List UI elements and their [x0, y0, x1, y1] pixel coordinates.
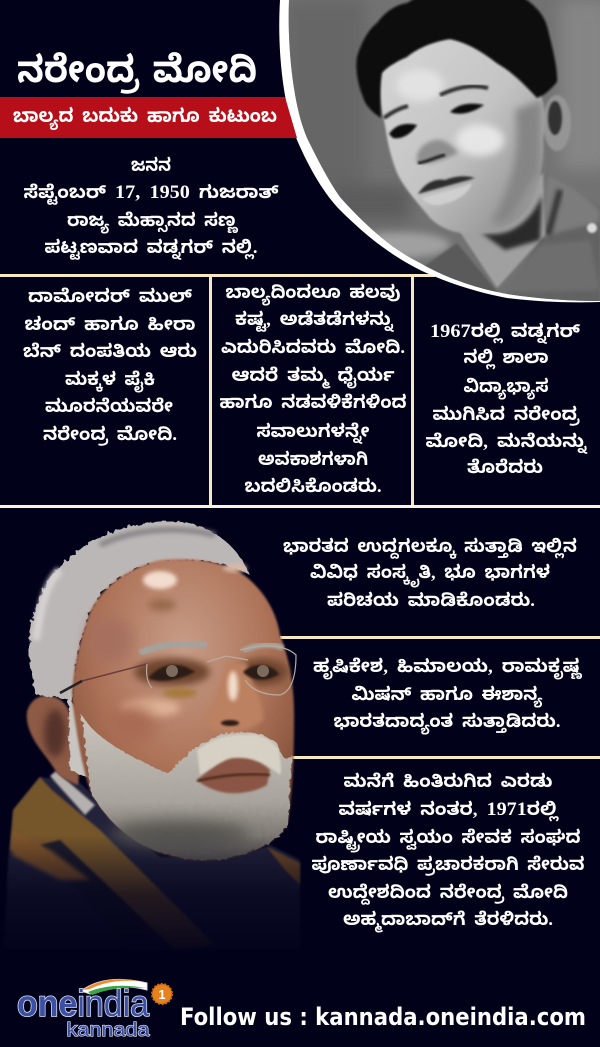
- eye sockets: [134, 658, 210, 686]
- text block: birth: ಜನನ: [131, 155, 171, 175]
- text block: 1971 Ahmedabad: ರಾಷ್ಟ್ರೀಯ ಸ್ವಯಂ ಸೇವಕ ಸಂಘದ: [316, 827, 581, 853]
- shirt: [424, 243, 499, 292]
- logo: oneindia kannada: kannada: [66, 1020, 150, 1041]
- text block: birth: ರಾಜ್ಯ ಮೆಹ್ಸಾನದ ಸಣ್ಣ: [67, 210, 238, 234]
- text block: 1971 Ahmedabad: ಉದ್ದೇಶದಿಂದ ನರೇಂದ್ರ ಮೋದಿ: [328, 882, 568, 905]
- hair: [356, 0, 557, 118]
- ear: [27, 696, 79, 785]
- lips: [197, 758, 270, 793]
- text block: 1971 Ahmedabad: ಪೂರ್ಣಾವಧಿ ಪ್ರಚಾರಕರಾಗಿ ಸೇರುವ: [312, 854, 584, 876]
- text block: 1971 Ahmedabad: ಮನೆಗೆ ಹಿಂತಿರುಗಿದ ಎರಡು: [344, 771, 552, 791]
- hair: [29, 521, 250, 780]
- text block: childhood hardships: ಬಾಲ್ಯದಿಂದಲೂ ಹಲವು: [226, 282, 400, 306]
- logo: oneindia kannada: oneindia: [17, 983, 149, 1024]
- text block: travels across India: ಪರಿಚಯ ಮಾಡಿಕೊಂಡರು.: [327, 590, 535, 610]
- text block: childhood hardships: [220, 282, 407, 496]
- text block: left home 1967: ಮುಗಿಸಿದ ನರೇಂದ್ರ: [432, 404, 580, 426]
- text block: left home 1967: ನಲ್ಲಿ ಶಾಲಾ: [464, 347, 548, 370]
- photo: young Narendra Modi in circle: [279, 0, 600, 305]
- text block: childhood hardships: ಆದರೆ ತಮ್ಮ ಧೈರ್ಯ: [232, 365, 395, 389]
- face: [72, 559, 294, 860]
- text block: travels across India: ಭಾರತದ ಉದ್ದಗಲಕ್ಕೂ ಸುತ್ತಾಡಿ ಇಲ್ಲಿನ: [283, 536, 577, 559]
- nose: [417, 140, 458, 163]
- text block: childhood hardships: ಬದಲಿಸಿಕೊಂಡರು.: [244, 476, 382, 496]
- text block: 1971 Ahmedabad: [312, 771, 584, 933]
- text block: parents: ಮಕ್ಕಳ ಪೈಕಿ: [65, 369, 155, 393]
- eyebrows: [440, 86, 488, 95]
- logo: oneindia kannada: 1: [158, 987, 166, 1002]
- text block: places visited: [313, 656, 583, 735]
- text block: childhood hardships: ಅವಕಾಶಗಳಾಗಿ: [258, 449, 368, 469]
- logo: oneindia kannada: [17, 979, 172, 1041]
- beard: [82, 715, 292, 860]
- grid dividers: [0, 274, 600, 759]
- text block: childhood hardships: ಕಷ್ಟ, ಅಡೆತಡೆಗಳನ್ನು: [235, 309, 395, 332]
- text block: 1971 Ahmedabad: ಅಹ್ಮದಾಬಾದ್‌ಗೆ ತೆರಳಿದರು.: [343, 909, 553, 933]
- body: [4, 777, 300, 950]
- face: [379, 38, 545, 234]
- text block: parents: [23, 286, 197, 446]
- text block: 1971 Ahmedabad: ವರ್ಷಗಳ ನಂತರ, 1971ರಲ್ಲಿ: [338, 799, 560, 822]
- text block: birth: ಸೆಪ್ಟೆಂಬರ್ 17, 1950 ಗುಜರಾತ್: [24, 182, 280, 205]
- text block: childhood hardships: ಸವಾಲುಗಳನ್ನೇ: [256, 421, 370, 444]
- text block: childhood hardships: ಎದುರಿಸಿದವರು ಮೋದಿ.: [221, 337, 405, 357]
- text block: childhood hardships: ಹಾಗೂ ನಡವಳಿಕೆಗಳಿಂದ: [220, 392, 407, 412]
- text block: birth: ಪಟ್ಟಣವಾದ ವಡ್ನಗರ್ ನಲ್ಲಿ.: [44, 237, 258, 260]
- nose: [205, 662, 263, 732]
- text block: places visited: ಮಿಷನ್ ಹಾಗೂ ಈಶಾನ್ಯ: [352, 684, 542, 708]
- lips: [418, 176, 475, 194]
- bottom fade: [0, 835, 320, 965]
- text block: left home 1967: ತೊರೆದರು: [467, 457, 543, 477]
- text block: parents: ಬೆನ್ ದಂಪತಿಯ ಆರು: [23, 341, 197, 361]
- text block: places visited: ಹೃಷಿಕೇಶ, ಹಿಮಾಲಯ, ರಾಮಕೃಷ್ಣ: [313, 656, 583, 680]
- photo: Narendra Modi portrait: [0, 521, 320, 965]
- subtitle banner: [0, 97, 297, 138]
- text block: parents: ಚಂದ್ ಹಾಗೂ ಹೀರಾ: [24, 314, 196, 334]
- text block: travels across India: [283, 536, 577, 610]
- text block: places visited: ಭಾರತದಾದ್ಯಂತ ಸುತ್ತಾಡಿದರು.: [334, 711, 560, 735]
- text block: left home 1967: 1967ರಲ್ಲಿ ವಡ್ನಗರ್: [430, 321, 581, 344]
- neck: [460, 173, 545, 288]
- text block: parents: ಮೂರನೆಯವರೇ: [45, 396, 173, 416]
- text block: left home 1967: ಮೋದಿ, ಮನೆಯನ್ನು: [426, 431, 588, 454]
- glasses: [60, 646, 296, 695]
- text block: parents: ದಾಮೋದರ್ ಮುಲ್: [28, 286, 193, 306]
- title: ನರೇಂದ್ರ ಮೋದಿ: [17, 49, 257, 94]
- text block: left home 1967: ವಿದ್ಯಾಭ್ಯಾಸ: [464, 376, 549, 400]
- text block: left home 1967: [426, 321, 588, 477]
- eyes: [450, 104, 484, 114]
- text block: travels across India: ವಿವಿಧ ಸಂಸ್ಕೃತಿ, ಭೂ ಭಾಗಗಳ: [310, 562, 550, 588]
- eyebrows: [140, 644, 207, 653]
- ear: [543, 95, 571, 151]
- text block: birth: [24, 155, 280, 260]
- subtitle banner: ಬಾಲ್ಯದ ಬದುಕು ಹಾಗೂ ಕುಟುಂಬ: [13, 106, 277, 130]
- eyes: [148, 665, 195, 681]
- text block: parents: ನರೇಂದ್ರ ಮೋದಿ.: [43, 424, 177, 446]
